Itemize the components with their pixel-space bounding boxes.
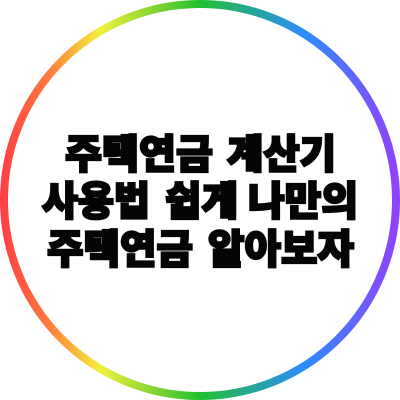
- title line 2: 사용법: [42, 180, 150, 224]
- title line 2: 나만의: [248, 180, 358, 224]
- title line 3: 알아보자: [208, 228, 354, 272]
- title line 2: [42, 180, 358, 224]
- title line 1: 계산기: [227, 133, 336, 177]
- title line 1: 주택연금: [65, 133, 213, 177]
- title: [42, 133, 358, 272]
- title line 2: 쉽게: [165, 180, 238, 224]
- title line 3: [47, 228, 354, 272]
- title line 1: [65, 133, 336, 177]
- title line 3: 주택연금: [47, 228, 193, 272]
